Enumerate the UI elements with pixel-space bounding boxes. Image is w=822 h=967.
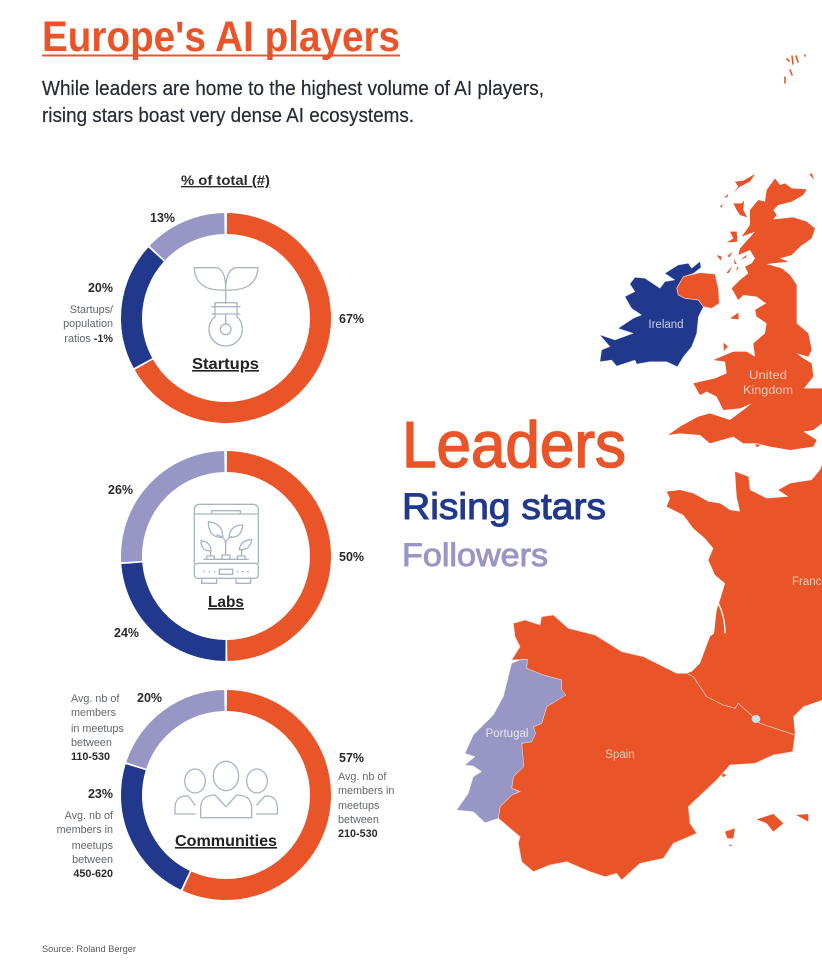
value: followers 20%: members xyxy=(71,707,117,719)
legend xyxy=(402,408,626,573)
label: communities: Communities xyxy=(175,833,277,850)
Ireland xyxy=(600,262,703,367)
panel: labs donut xyxy=(108,462,364,650)
value: leaders 50%: 50% xyxy=(339,550,364,564)
donut chart: labs xyxy=(132,462,320,650)
country labels: Spain xyxy=(605,749,635,761)
icon: sprouting light bulb xyxy=(194,268,258,346)
country labels: United xyxy=(749,370,787,382)
value: rising stars 23%: between xyxy=(72,854,113,866)
value: leaders 57%: 210-530 xyxy=(338,828,378,840)
Shetland islands xyxy=(785,55,805,83)
value: leaders 57%: 57% xyxy=(339,751,364,765)
map of western Europe xyxy=(457,55,822,880)
value: followers 26%: 26% xyxy=(108,483,133,497)
value: leaders 57%: between xyxy=(338,814,379,826)
value: leaders 57%: meetups xyxy=(338,800,380,812)
value: followers 13%: 13% xyxy=(150,211,175,225)
value: rising stars 23%: Avg. nb of xyxy=(65,810,114,822)
value: rising stars 23% xyxy=(57,787,114,880)
Spain xyxy=(498,615,795,880)
legend: Rising stars: Rising stars xyxy=(402,486,606,527)
label: startups: Startups xyxy=(192,356,259,373)
donut chart: startups xyxy=(132,224,320,412)
value: followers 20%: in meetups xyxy=(71,723,124,735)
map: United Kingdom and Ireland xyxy=(600,173,822,450)
value: leaders 57%: Avg. nb of xyxy=(338,771,387,783)
Balearic islands xyxy=(722,773,808,846)
value: rising stars 24%: 24% xyxy=(114,626,139,640)
Scottish islands xyxy=(717,173,814,447)
icon: group of people xyxy=(175,761,277,818)
chart heading: % of total (#) xyxy=(181,173,270,188)
value: rising stars 23%: members in xyxy=(57,824,113,836)
value: followers 20%: between xyxy=(71,737,112,749)
value: followers 20%: 110-530 xyxy=(71,751,110,763)
map: France, Spain and Portugal xyxy=(457,465,822,880)
panel: communities donut xyxy=(57,691,394,890)
subtitle xyxy=(42,78,544,127)
donut chart: communities xyxy=(132,700,320,890)
United Kingdom mainland xyxy=(668,178,822,450)
panel: startups donut xyxy=(63,211,364,412)
Portugal xyxy=(457,659,566,823)
subtitle: While leaders are home to the highest volume of AI players, xyxy=(42,78,544,100)
title: Europe's AI players xyxy=(42,13,400,61)
label: labs: Labs xyxy=(208,594,244,611)
subtitle: rising stars boast very dense AI ecosystems. xyxy=(42,105,414,127)
icon: plant growth cabinet xyxy=(194,504,258,583)
Northern Ireland xyxy=(677,273,719,308)
Andorra xyxy=(752,715,760,723)
value: rising stars 20%: 20% xyxy=(88,281,113,295)
legend: Leaders: Leaders xyxy=(402,408,626,481)
value: leaders 67%: 67% xyxy=(339,312,364,326)
value: rising stars 23%: 23% xyxy=(88,787,113,801)
country labels: Kingdom xyxy=(743,385,793,397)
Gironde estuary xyxy=(718,603,725,633)
value: followers 20%: Avg. nb of xyxy=(71,693,120,705)
value: followers 20% xyxy=(71,691,162,763)
value: rising stars 20% xyxy=(63,281,113,345)
value: leaders 57%: members in xyxy=(338,785,394,797)
value: rising stars 23%: meetups xyxy=(72,840,114,852)
country labels: Portugal xyxy=(486,728,528,740)
source note: Source: Roland Berger xyxy=(42,944,136,954)
country labels: Ireland xyxy=(648,319,684,331)
value: leaders 57% xyxy=(338,751,394,840)
France xyxy=(667,465,822,735)
country labels xyxy=(486,319,822,761)
value: rising stars 23%: 450-620 xyxy=(73,868,113,880)
value: followers 20%: 20% xyxy=(137,691,162,705)
value: rising stars 20%: population xyxy=(63,318,113,330)
legend: Followers: Followers xyxy=(402,537,548,573)
value: rising stars 20%: ratios -1% xyxy=(64,333,113,345)
value: rising stars 20%: Startups/ xyxy=(70,304,113,316)
